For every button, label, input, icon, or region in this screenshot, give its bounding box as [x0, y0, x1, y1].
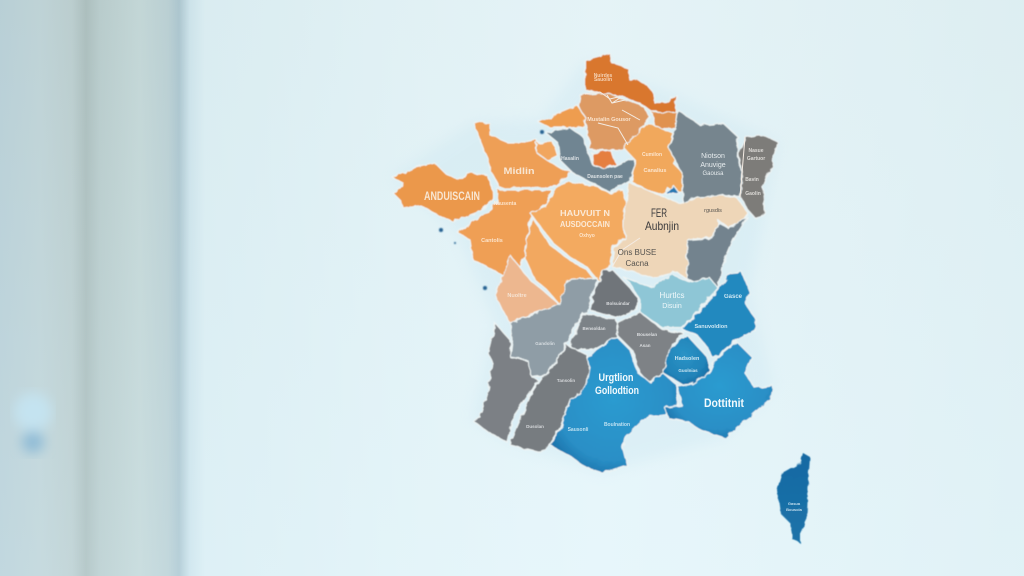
label: Quercy: Bensoldan: [582, 326, 606, 331]
label: Pyrénées second line: Dusolan: [526, 424, 544, 429]
region: Bretagne: [392, 163, 493, 222]
region: Île-de-France: [545, 128, 635, 192]
label: Loire lower: Cantolis: [481, 238, 503, 244]
region: Ardennes strip: [652, 112, 677, 128]
region: Alsace: [738, 135, 778, 220]
region: Languedoc: [550, 337, 677, 473]
label: Alpes: Gasce: [724, 294, 743, 300]
label: Lorraine third line: Gaousa: [702, 171, 724, 177]
label: Bourgogne east: rgusdis: [704, 208, 722, 214]
label: Limousin: Bolsuindar: [606, 301, 630, 306]
region: Landes: [472, 323, 538, 442]
region: Nord: [585, 53, 677, 112]
label: Normandie: Midlin: [504, 166, 534, 176]
region: Champagne: [623, 123, 682, 195]
label: Gascogne: Gandolin: [535, 341, 555, 346]
label: Centre: HAUVUIT N: [560, 208, 610, 218]
label: Picardie: Mustalin Gousor: [587, 117, 632, 123]
door handle blur: [14, 393, 52, 453]
coastal islands: [439, 130, 544, 290]
label: Corse second line: Bousola: [786, 507, 803, 512]
region: Lorraine: [668, 110, 742, 203]
region: Bourgogne: [612, 182, 748, 280]
label: Nord: Nuirdes: [594, 73, 613, 79]
label: Languedoc: Urgtlion: [598, 372, 634, 384]
label: Corse: Gasua: [788, 501, 801, 506]
label: Bourgogne south second line: Cacna: [625, 259, 649, 268]
label: Centre small: Oxhyo: [579, 233, 595, 239]
label: Nord second line: Sauolin: [594, 77, 612, 83]
label: Alsace fourth line: Gaolin: [745, 191, 761, 197]
interior border lines: [585, 92, 745, 267]
region: Gascogne: [510, 278, 597, 377]
label: Pays de la Loire: Nausenta: [494, 201, 516, 207]
label: Pyrénées: Tansolin: [557, 378, 575, 383]
label: Alsace: Nasue: [748, 148, 764, 154]
label: Alsace third line: Bavin: [745, 177, 759, 183]
region: Cévennes: [617, 312, 683, 382]
label: Île-de-France: Hasalin: [561, 156, 579, 162]
region: Manche: [537, 142, 557, 160]
region: Marne spot: [665, 185, 680, 194]
region: Limousin: [590, 270, 638, 318]
region: Centre: [530, 182, 627, 283]
label: Poitou: Nuoltre: [507, 293, 527, 299]
label: Auvergne: Hurtlcs: [660, 291, 684, 300]
label: Alsace second line: Gartuor: [747, 156, 765, 162]
label: Rhône second line: Guolnias: [678, 368, 698, 373]
label: Languedoc coast: Sausonli: [568, 427, 589, 433]
label: Lorraine second line: Anuvige: [700, 162, 726, 169]
label: Provence: Dottitnit: [704, 396, 744, 410]
region: Jura: [687, 217, 748, 287]
region: Corse: [777, 453, 810, 543]
label: Rhône: Hadsolen: [675, 356, 700, 362]
region: Auvergne light blue: [623, 275, 718, 328]
label: Alpes second line: Sanuvoldion: [694, 324, 728, 330]
region: Pays de la Loire: [457, 190, 552, 278]
label: Cévennes: Bouselan: [637, 332, 657, 337]
label: Champagne: Cumilon: [642, 152, 662, 158]
region: Rhône circle: [663, 335, 710, 385]
label: Bretagne: ANDUISCAIN: [424, 189, 480, 203]
region: Picardie: [578, 93, 650, 150]
region: Touraine: [525, 217, 597, 305]
label: Île-de-France second line: Daunsolen pae: [587, 174, 623, 180]
region: Haute-Normandie: [538, 105, 586, 128]
label: Languedoc second line: Gollodtion: [595, 385, 639, 397]
label: Languedoc lower: Boulnation: [604, 422, 630, 428]
map of France regions: [392, 53, 810, 543]
region: Pyrénées grey: [510, 345, 590, 453]
region: Paris core: [592, 150, 617, 168]
region: Basse-Normandie: [473, 122, 572, 188]
label: Bourgogne south: Ons BUSE: [618, 248, 656, 257]
label: Bourgogne second line: Aubnjin: [645, 219, 679, 233]
region: Quercy: [570, 313, 617, 350]
label: Champagne second line: Canalius: [644, 168, 666, 174]
map shadow: [392, 60, 778, 473]
label: Cévennes second line: Asan: [639, 343, 651, 348]
label: Bourgogne: FER: [651, 206, 667, 220]
label: Centre second line: AUSDOCCAIN: [560, 219, 610, 229]
region: Alpes: [683, 272, 755, 358]
region labels: [424, 73, 803, 512]
label: Lorraine: Niotson: [701, 153, 725, 160]
region: Provence: [665, 342, 773, 438]
region: Poitou: [497, 255, 560, 323]
label: Auvergne second line: Disuin: [662, 303, 682, 310]
